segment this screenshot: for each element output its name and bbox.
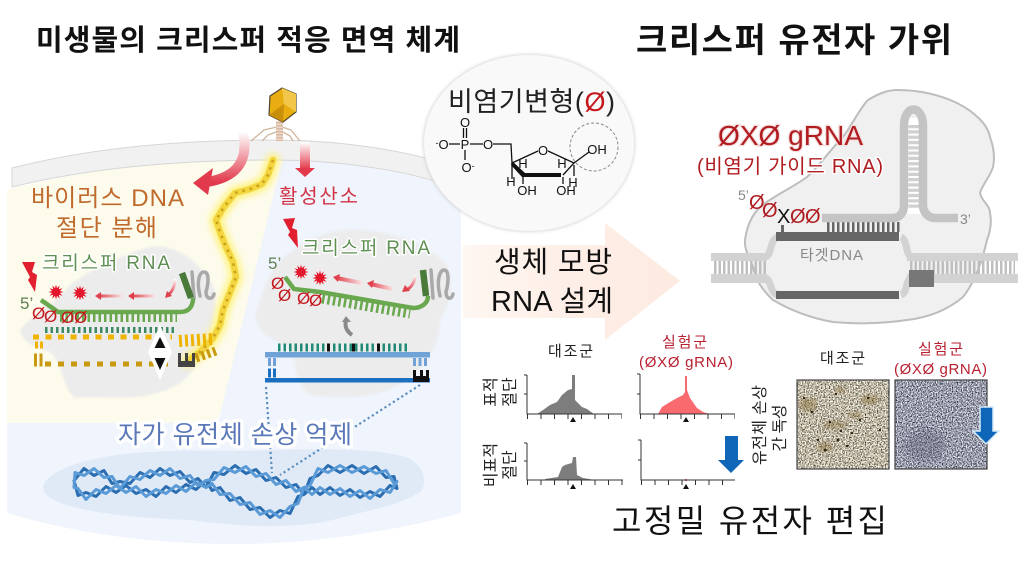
label: genome damage liver toxicity: 간 독성 — [771, 404, 789, 452]
blue CRISPR array duplex — [265, 344, 430, 382]
panel: modified base circle — [423, 54, 635, 232]
hairpin left — [192, 272, 214, 298]
hairpin right — [431, 270, 453, 298]
label: sequence: Ø — [749, 192, 765, 214]
label: self genome damage suppression: 자가 유전체 손상 억제 — [118, 421, 352, 449]
label: biomimetic RNA design — [491, 247, 613, 318]
histogram: treated on-target — [637, 374, 735, 422]
protein blob left — [20, 246, 215, 398]
label: crispr RNA left: 크리스퍼 RNA — [42, 252, 170, 274]
icon: burst right — [294, 264, 328, 286]
green RNA left — [41, 273, 193, 330]
label: off-target cleavage: 비표적 — [482, 443, 500, 487]
label: gRNA subtitle: (비염기 가이드 RNA) — [697, 155, 883, 178]
label: high-precision gene editing: 고정밀 유전자 편집 — [612, 503, 887, 539]
label: sequence: Ø — [762, 200, 778, 222]
label: reactive oxygen: 활성산소 — [279, 185, 358, 208]
label: biomimetic RNA design: 생체 모방 — [494, 247, 612, 279]
crRNA complex: left — [20, 252, 216, 380]
chemical structure: OH — [517, 183, 537, 198]
label: 5 prime right: 5’ — [268, 254, 281, 273]
chemical structure: O — [461, 160, 472, 175]
label: sequence: Ø — [790, 206, 806, 228]
panel: histology control — [797, 350, 889, 469]
label: histology treated — [894, 341, 987, 378]
label: target DNA: 타겟DNA — [800, 247, 863, 264]
label: histology control: 대조군 — [820, 350, 865, 367]
icon: burst left — [48, 284, 88, 300]
label: gRNA: ØXØ gRNA — [718, 120, 863, 151]
label: modified bases left: Ø — [74, 308, 87, 327]
chart group: sequencing histograms — [482, 334, 744, 489]
label: genome damage liver toxicity: 유전체 손상 — [751, 385, 769, 465]
label: viral DNA cleavage — [31, 185, 184, 242]
Cas9 blob — [745, 90, 994, 323]
label: on-target cleavage — [482, 377, 519, 407]
heading: modified base: 비염기변형(Ø) — [448, 87, 615, 117]
tissue image treated — [895, 380, 987, 469]
protein blob right — [255, 230, 451, 397]
label: off-target cleavage — [482, 443, 519, 487]
label: sequence: X — [777, 206, 790, 228]
title: right: 크리스퍼 유전자 가위 — [636, 22, 952, 60]
icon: lightning left — [22, 262, 37, 292]
label: sequence — [749, 192, 821, 228]
genome — [74, 466, 397, 518]
gRNA hairpin — [822, 110, 958, 218]
label: biomimetic RNA design: RNA 설계 — [491, 286, 613, 318]
label: histology treated: (ØXØ gRNA) — [894, 361, 987, 378]
chemical structure: O — [460, 115, 470, 130]
label: 3 prime: 3’ — [960, 211, 971, 227]
arrow: red curved to viral DNA cleavage — [193, 132, 245, 195]
green RNA right — [285, 270, 428, 314]
label: on-target cleavage: 표적 — [482, 377, 500, 407]
panel: bacterial cell — [7, 140, 461, 544]
panel: histology treated — [894, 341, 999, 469]
label: modified bases right: Ø — [278, 286, 291, 305]
arrow: red down to reactive oxygen — [295, 142, 315, 177]
tissue image control — [797, 380, 889, 469]
PAM left — [178, 353, 195, 367]
label: modified bases right: Ø — [297, 289, 310, 308]
chemical structure: H — [557, 156, 567, 171]
chemical structure: P — [461, 137, 469, 152]
title: left: 미생물의 크리스퍼 적응 면역 체계 — [36, 24, 460, 57]
arrow: blue down chart — [718, 436, 744, 473]
label: genome damage liver toxicity — [751, 385, 789, 465]
chemical structure: O — [538, 143, 548, 158]
label: 5 prime left: 5’ — [20, 294, 33, 313]
histogram: control off-target — [524, 443, 623, 489]
label: sequence: Ø — [805, 206, 821, 228]
icon: bacteriophage — [251, 88, 300, 141]
label: viral DNA cleavage: 절단 분해 — [56, 215, 157, 242]
arrow: blue down histology — [973, 407, 999, 444]
chemical structure: O — [438, 137, 449, 152]
chemical structure: - — [435, 138, 438, 148]
label: experimental — [639, 334, 733, 371]
label: crispr RNA right: 크리스퍼 RNA — [302, 237, 430, 259]
chemical structure: OH — [587, 142, 607, 157]
arrows: pink direction right — [333, 274, 415, 292]
icon: unwinding arrows — [148, 325, 172, 380]
icon: lightning right — [283, 218, 298, 248]
chemical structure: H — [518, 156, 528, 171]
viral DNA strand — [188, 160, 273, 361]
chemical structure: - — [472, 161, 475, 171]
chemical structure: H — [506, 174, 516, 189]
chemical structure: H — [568, 175, 578, 190]
label: modified bases left: Ø — [32, 304, 45, 323]
dotted lines to genome — [266, 385, 420, 475]
panel: gRNA gene scissors diagram — [697, 90, 1018, 323]
label: control: 대조군 — [548, 343, 593, 360]
panel: nucleoid region — [43, 449, 424, 526]
label: experimental: 실험군 — [662, 334, 707, 351]
label: modified bases right: Ø — [271, 274, 284, 293]
arrows: pink direction left — [95, 279, 175, 300]
label: histology treated: 실험군 — [918, 341, 963, 358]
label: modified bases left: Ø — [61, 308, 74, 327]
arrow: biomimetic design — [463, 223, 680, 340]
label: off-target cleavage: 절단 — [501, 450, 519, 480]
chemical structure: O — [483, 137, 493, 152]
chemical structure — [435, 115, 618, 198]
DNA strands — [711, 237, 1018, 295]
arrow: grey curved — [342, 316, 352, 335]
label: on-target cleavage: 절단 — [501, 377, 519, 407]
label: modified bases left: Ø — [44, 307, 57, 326]
yellow target DNA left — [33, 337, 216, 364]
label: modified bases left — [32, 304, 87, 327]
histogram: treated off-target — [638, 440, 735, 489]
label: 5 prime: 5’ — [738, 187, 749, 203]
crRNA complex: right — [265, 218, 453, 475]
label: modified bases right: Ø — [309, 291, 322, 310]
label: modified bases right — [271, 274, 322, 310]
chemical structure: OH — [556, 183, 576, 198]
histogram: control on-target — [524, 375, 622, 422]
label: experimental: (ØXØ gRNA) — [639, 354, 733, 371]
label: viral DNA cleavage: 바이러스 DNA — [31, 185, 184, 212]
target strands — [776, 225, 934, 299]
